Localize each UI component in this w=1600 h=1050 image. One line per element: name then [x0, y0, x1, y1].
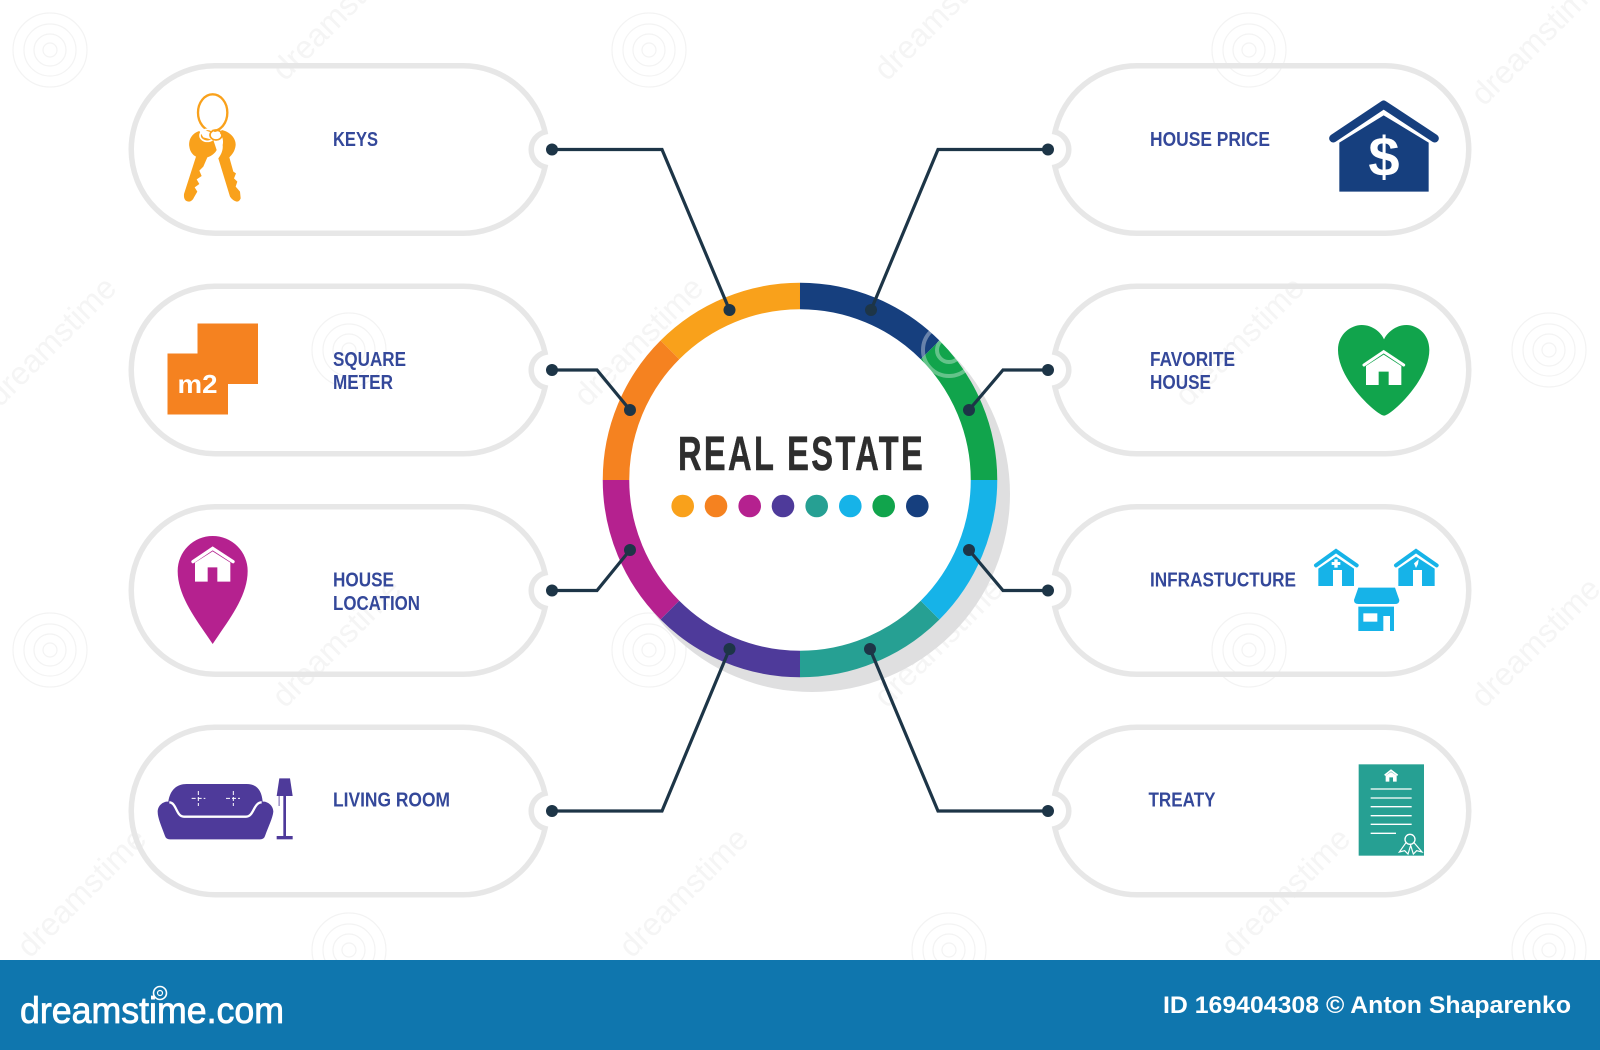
icon: location pin: [178, 536, 248, 644]
icon: m2 squares: [168, 324, 258, 414]
label: favorite house: HOUSE: [1150, 372, 1211, 394]
label: house price: HOUSE PRICE: [1150, 129, 1270, 151]
center ring: [603, 283, 1010, 692]
ring shadow: [614, 296, 1010, 692]
label: square meter: METER: [333, 372, 393, 394]
icon: m2 squares: m2: [178, 369, 218, 399]
connector: keys: [546, 144, 736, 316]
icon: house with dollar: $: [1368, 125, 1400, 188]
pill outline: house price: [1055, 66, 1469, 233]
pill outline: square meter: [131, 286, 545, 454]
connector: favorite house: [963, 364, 1054, 416]
connector: house location: [546, 544, 636, 596]
ring watermark: [923, 324, 975, 376]
connector: infrastructure: [963, 544, 1054, 596]
ring segments: [616, 296, 984, 664]
connector: house price: [865, 144, 1054, 316]
label: house location: HOUSE: [333, 570, 394, 592]
panel: square meter: [131, 286, 545, 454]
ring white center: [603, 283, 997, 677]
label: square meter: SQUARE: [333, 349, 406, 371]
pill outline: infrastructure: [1055, 507, 1469, 674]
connector: living room: [546, 643, 736, 817]
label: square meter: [333, 349, 406, 394]
pill outline: keys: [131, 66, 545, 233]
icon: hospital, pet clinic and shop: [1316, 551, 1437, 631]
panel: house price: [1055, 66, 1469, 233]
watermark text: dreamstime: [566, 269, 710, 413]
label: house location: [333, 570, 420, 615]
connector: treaty: [864, 643, 1054, 817]
label: favorite house: [1150, 349, 1235, 394]
pill outline: house location: [131, 507, 545, 674]
icon: heart with house: [1338, 325, 1429, 416]
footer banner: [0, 960, 1600, 1050]
panel: house location: [131, 507, 545, 674]
icon: house with dollar: [1333, 105, 1435, 192]
pill outline: living room: [131, 727, 545, 895]
icon: treaty document: [1359, 764, 1424, 856]
color dots row: [671, 495, 929, 517]
panel: treaty: [1055, 727, 1469, 895]
label: house location: LOCATION: [333, 593, 420, 615]
watermark text: dreamstime: [264, 570, 408, 714]
watermark text: dreamstime: [1167, 269, 1311, 413]
image credit: ID 169404308 © Anton Shaparenko: [1163, 992, 1571, 1019]
watermark text: dreamstime: [611, 820, 755, 964]
panel: infrastructure: [1055, 507, 1469, 674]
panel: favorite house: [1055, 286, 1469, 454]
watermark text: dreamstime: [1213, 820, 1357, 964]
icon: keys: [184, 94, 241, 202]
pill outline: favorite house: [1055, 286, 1469, 454]
label: favorite house: FAVORITE: [1150, 349, 1235, 371]
watermark text: dreamstime: [866, 570, 1010, 714]
watermark text: dreamstime: [9, 820, 153, 964]
connector: square meter: [546, 364, 636, 416]
label: infrastructure: INFRASTUCTURE: [1150, 570, 1296, 592]
panel: living room: [131, 727, 545, 895]
title: REAL ESTATE: [678, 427, 923, 481]
label: treaty: TREATY: [1148, 790, 1216, 812]
icon: sofa and lamp: [158, 778, 293, 839]
panel: keys: [131, 66, 545, 233]
label: keys: KEYS: [333, 129, 378, 151]
pill outline: treaty: [1055, 727, 1469, 895]
dreamstime logo: dreamstime.com: [20, 990, 284, 1031]
label: living room: LIVING ROOM: [333, 790, 450, 812]
